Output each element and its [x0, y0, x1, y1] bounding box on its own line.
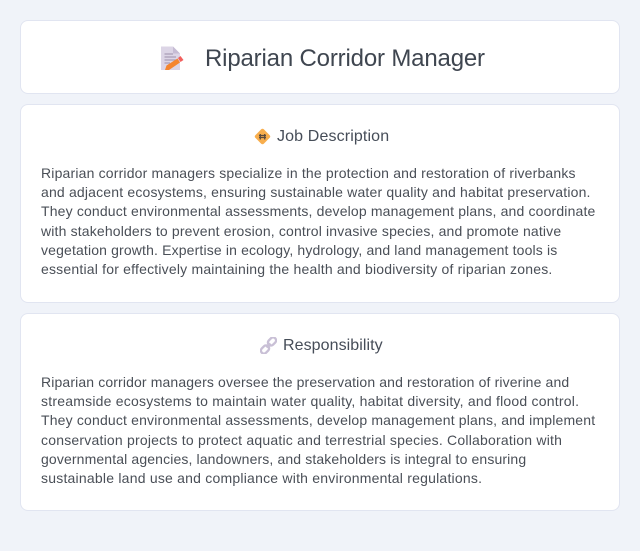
text: job description: vegetation growth. Expertise in ecology, hydrology, and land management tools is — [41, 242, 557, 258]
text: responsibility: streamside ecosystems to maintain water quality, habitat diversity, and flood control. — [41, 393, 579, 409]
icon: document with pencil — [161, 46, 184, 70]
text: job description: and adjacent ecosystems, ensuring sustainable water quality and habitat preservation. — [41, 184, 591, 200]
text: responsibility: sustainable land use and compliance with environmental regulations. — [41, 470, 482, 486]
icon: chain link — [260, 337, 277, 354]
text: job description: They conduct environmental assessments, develop management plans, and coordinate — [41, 203, 595, 219]
panel: responsibility — [20, 313, 620, 511]
icon: road sign diamond — [254, 128, 270, 144]
text: job description: Riparian corridor managers specialize in the protection and restoration of riverbanks — [41, 165, 576, 181]
text: job description: essential for effectively maintaining the health and biodiversity of riparian zones. — [41, 261, 552, 277]
text: responsibility: Riparian corridor managers oversee the preservation and restoration of riverine and — [41, 374, 569, 390]
panel: title card — [20, 20, 620, 94]
text: responsibility — [41, 374, 596, 486]
text: responsibility: They conduct environmental assessments, develop management plans, and implement — [41, 412, 595, 428]
heading: job description: Job Description — [277, 128, 389, 145]
text: job description: with stakeholders to prevent erosion, control invasive species, and promote native — [41, 223, 561, 239]
panel: job description — [20, 104, 620, 303]
text: responsibility: governmental agencies, landowners, and stakeholders is integral to ensuring — [41, 451, 526, 467]
text: responsibility: conservation projects to protect aquatic and terrestrial species. Collaboration with — [41, 432, 562, 448]
heading: responsibility: Responsibility — [283, 337, 383, 354]
text: job description — [41, 165, 595, 277]
title: Riparian Corridor Manager — [205, 45, 485, 72]
